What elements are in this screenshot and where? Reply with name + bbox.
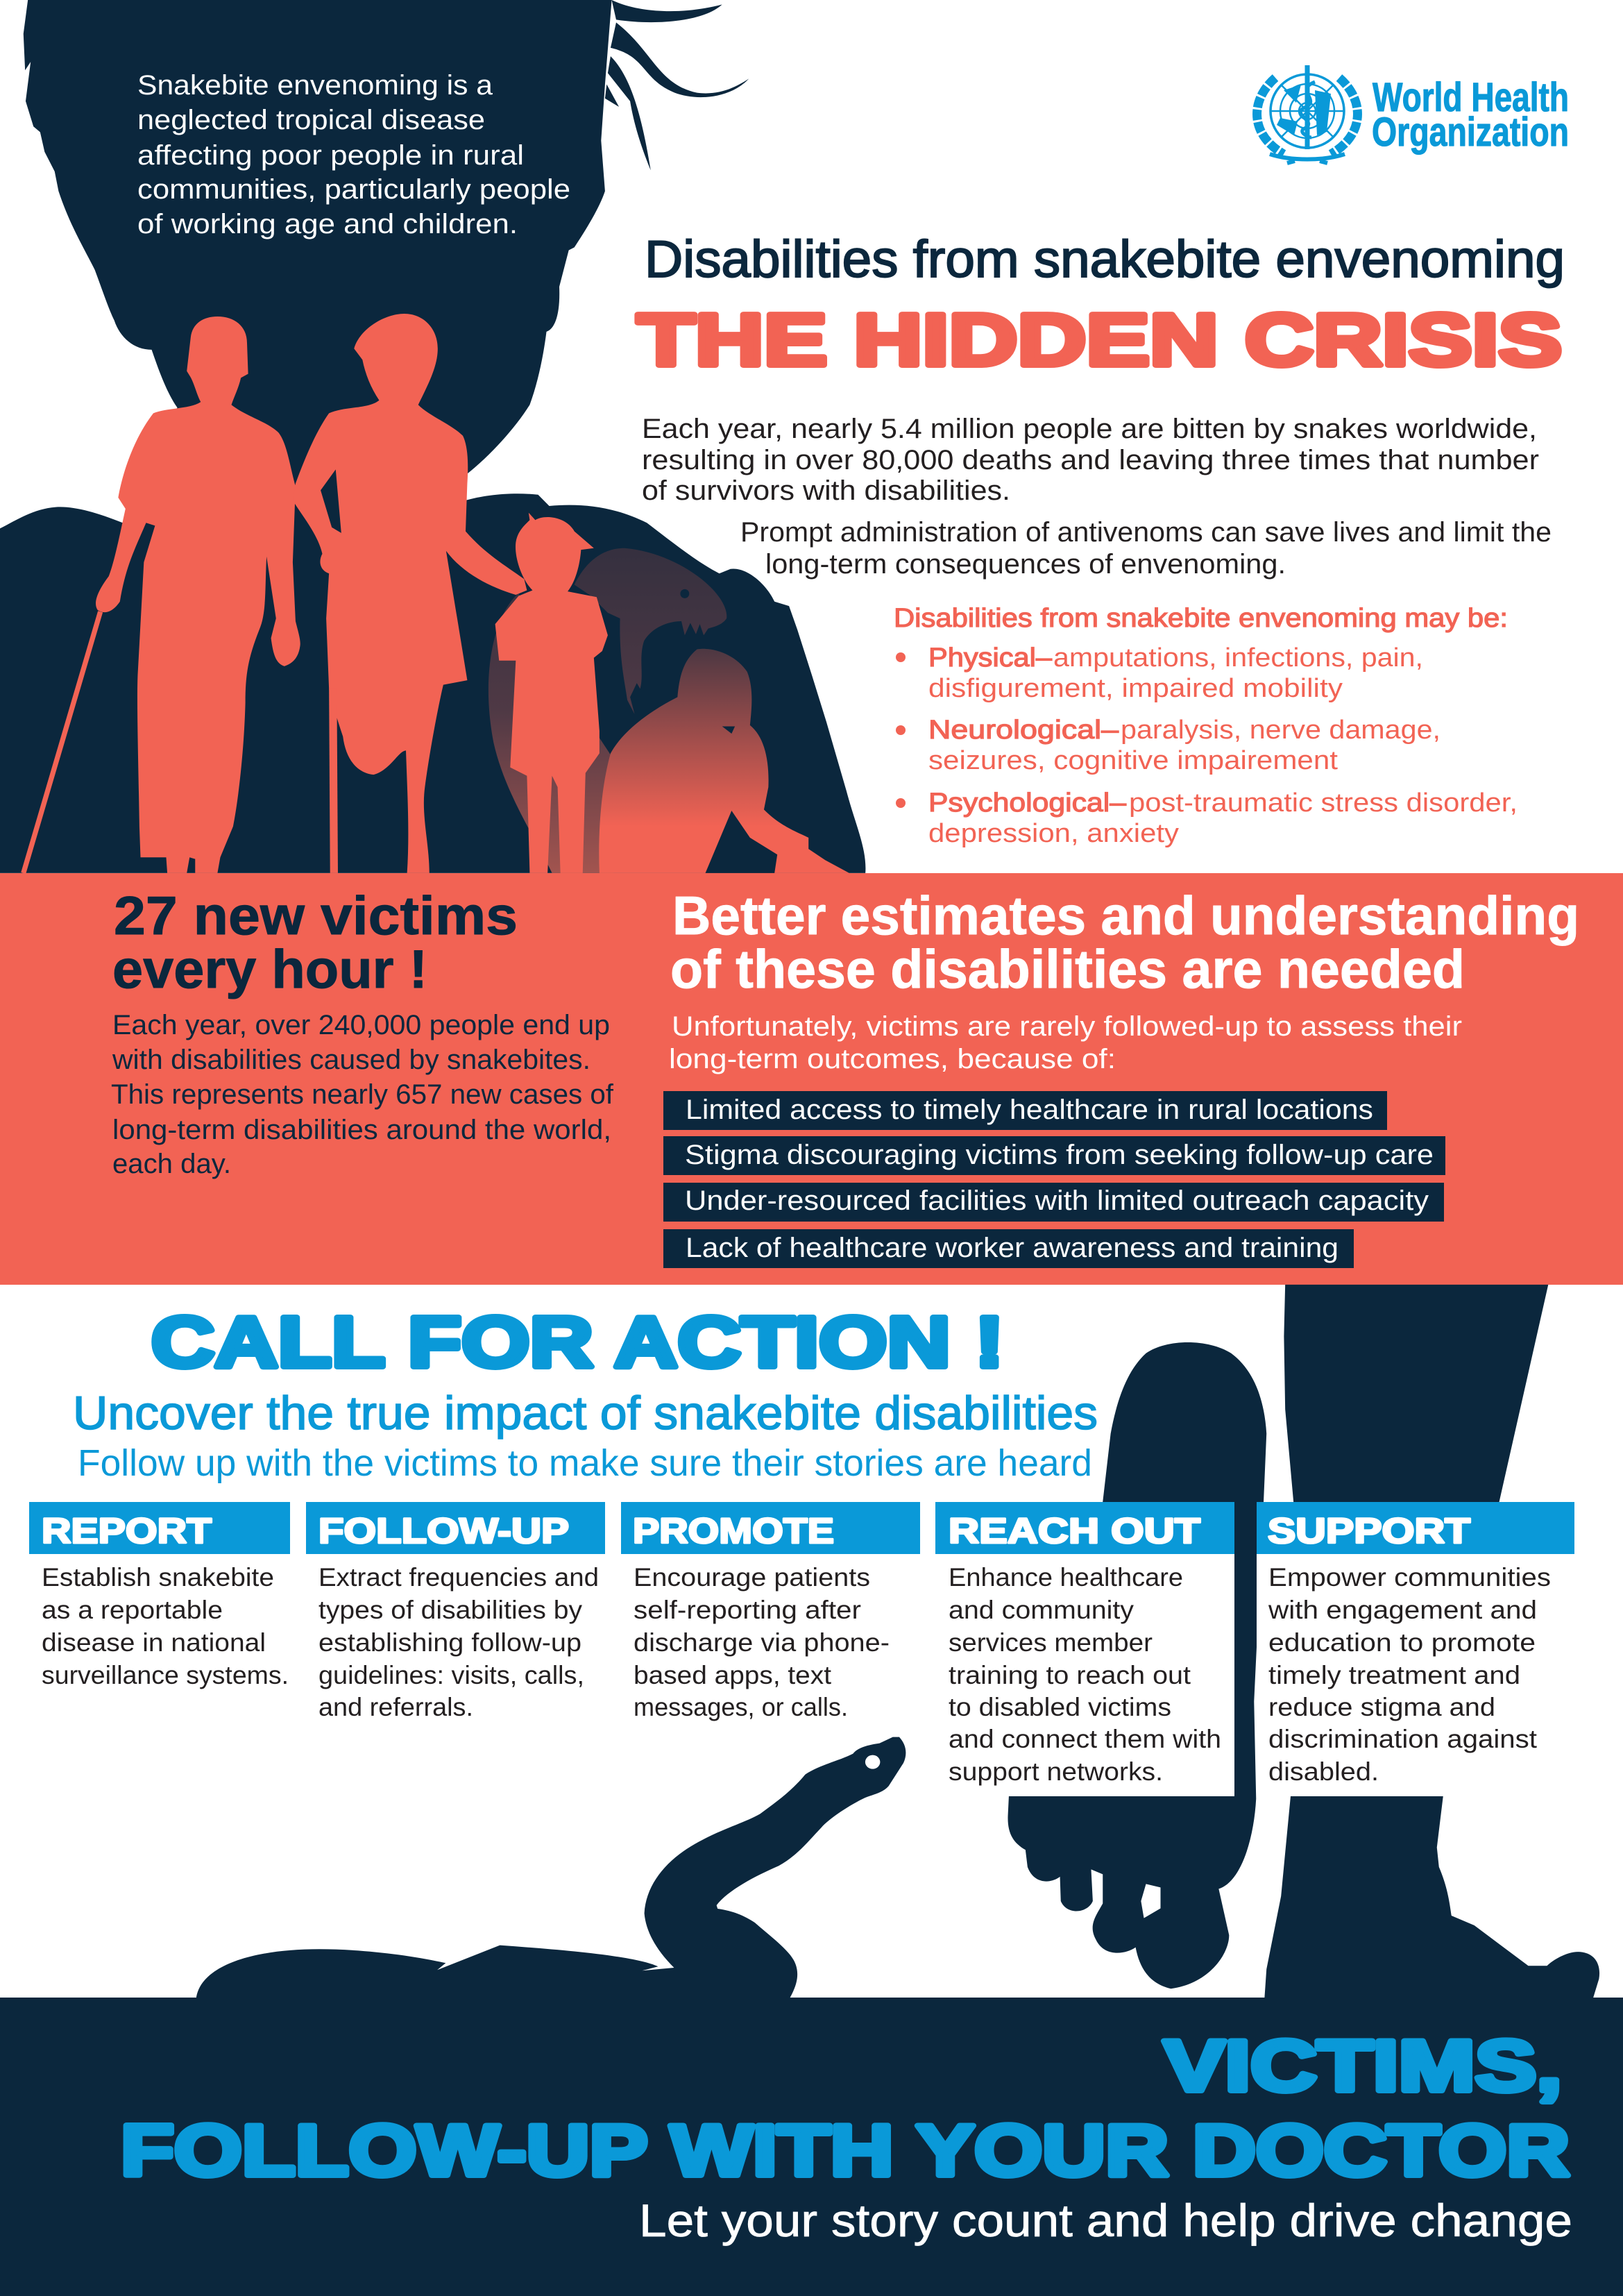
paragraph: long-term outcomes, because of: xyxy=(669,1044,1116,1074)
intro paragraph: Each year, nearly 5.4 million people are bitten by snakes worldwide, xyxy=(642,414,1537,444)
snake in the dark xyxy=(575,548,726,714)
subhead 2: Follow up with the victims to make sure their stories are heard xyxy=(78,1442,1092,1484)
illustration: snake xyxy=(196,1737,906,1999)
paragraph: Unfortunately, victims are rarely followed-up to assess their xyxy=(672,1011,1462,1042)
paragraph xyxy=(669,1011,1462,1074)
title xyxy=(637,230,1565,381)
card: support: SUPPORT xyxy=(1268,1511,1470,1551)
bar: stigma xyxy=(663,1136,1445,1175)
list item: psychological: Psychological– xyxy=(928,788,1127,818)
intro text on head xyxy=(137,70,570,239)
intro text on head: of working age and children. xyxy=(137,209,518,239)
stat text: long-term disabilities around the world, xyxy=(112,1115,611,1145)
gap between the sitting figure's legs xyxy=(706,727,777,873)
intro text on head: affecting poor people in rural xyxy=(137,140,524,171)
card: support: with engagement and xyxy=(1268,1596,1537,1624)
stat heading: 27 new victims xyxy=(114,885,518,946)
card: support: discrimination against xyxy=(1268,1725,1538,1753)
icon: emblem xyxy=(1257,65,1357,163)
list item: psychological xyxy=(896,788,1518,848)
intro paragraph xyxy=(642,414,1552,580)
list item: physical: Physical– xyxy=(928,643,1053,673)
card: reach out: to disabled victims xyxy=(949,1693,1171,1721)
card: support: disabled. xyxy=(1268,1757,1379,1786)
call for action heading xyxy=(73,1302,1098,1484)
stat heading: every hour ! xyxy=(112,938,427,999)
logo wordmark xyxy=(1372,75,1569,155)
list item: neurological: seizures, cognitive impairement xyxy=(928,746,1338,775)
bar: under-resourced: Under-resourced facilities with limited outreach capacity xyxy=(685,1185,1429,1216)
intro text on head: communities, particularly people xyxy=(137,174,570,205)
list item: neurological xyxy=(896,716,1441,775)
card: follow-up: establishing follow-up xyxy=(318,1628,581,1657)
panel: bottom call to victims xyxy=(0,1998,1623,2296)
card: follow-up: and referrals. xyxy=(318,1693,473,1721)
heading xyxy=(670,885,1579,999)
list: types of disabilities xyxy=(894,604,1518,848)
sitting figure with gradient xyxy=(599,649,849,873)
card: report: Establish snakebite xyxy=(42,1563,274,1592)
illustration: silhouettes of head, survivors, snake xyxy=(0,0,865,873)
logo wordmark: Organization xyxy=(1372,110,1569,155)
bar: under-resourced xyxy=(663,1183,1444,1222)
cane xyxy=(24,611,101,873)
card: follow-up: FOLLOW-UP xyxy=(318,1511,569,1551)
bar: lack of awareness xyxy=(663,1229,1354,1268)
big head and shoulders silhouette xyxy=(0,0,865,873)
subhead: Uncover the true impact of snakebite disabilities xyxy=(73,1387,1098,1440)
list heading: Disabilities from snakebite envenoming may be: xyxy=(894,604,1508,633)
gap between toes xyxy=(1141,1884,1160,1918)
card: reach out: REACH OUT xyxy=(949,1511,1200,1551)
intro paragraph: Prompt administration of antivenoms can save lives and limit the xyxy=(740,517,1552,548)
stat text: each day. xyxy=(112,1149,231,1179)
panel: 27 new victims xyxy=(111,885,614,1179)
child xyxy=(495,513,608,873)
card: promote: based apps, text xyxy=(634,1661,832,1689)
card: promote: PROMOTE xyxy=(633,1511,834,1551)
card: reach out: and community xyxy=(949,1596,1135,1624)
card: support: reduce stigma and xyxy=(1268,1693,1495,1721)
headline line 1: VICTIMS, xyxy=(1164,2026,1562,2107)
bar: limited access xyxy=(663,1091,1387,1130)
intro paragraph: resulting in over 80,000 deaths and leaving three times that number xyxy=(642,445,1539,475)
panel: better estimates xyxy=(663,885,1579,1268)
headline line 2: FOLLOW-UP WITH YOUR DOCTOR xyxy=(121,2111,1570,2191)
list item: physical xyxy=(896,643,1423,703)
stat text xyxy=(111,1010,614,1179)
logo wordmark: World Health xyxy=(1373,75,1569,120)
stat text: This represents nearly 657 new cases of xyxy=(111,1079,614,1110)
card: promote: self-reporting after xyxy=(634,1596,861,1624)
subtitle: Disabilities from snakebite envenoming xyxy=(645,230,1565,288)
icon: WHO logo xyxy=(1257,65,1569,163)
list item: psychological: post-traumatic stress disorder, xyxy=(1129,788,1518,818)
headline: CALL FOR ACTION ! xyxy=(151,1302,1004,1382)
tagline: Let your story count and help drive change xyxy=(639,2195,1572,2246)
main headline: THE HIDDEN CRISIS xyxy=(637,299,1562,381)
intro paragraph: of survivors with disabilities. xyxy=(642,475,1010,506)
stat text: Each year, over 240,000 people end up xyxy=(112,1010,610,1040)
survivor with cane xyxy=(96,316,300,873)
card: reach out: services member xyxy=(949,1628,1153,1657)
card: report xyxy=(29,1502,290,1689)
card: support: Empower communities xyxy=(1268,1563,1551,1592)
intro text on head: Snakebite envenoming is a xyxy=(137,70,493,101)
card: reach out: training to reach out xyxy=(949,1661,1191,1689)
gap between arm and torso xyxy=(321,469,341,533)
card: promote xyxy=(621,1502,920,1721)
card: follow-up: Extract frequencies and xyxy=(318,1563,599,1592)
card: follow-up: guidelines: visits, calls, xyxy=(318,1661,584,1689)
panel: coral band xyxy=(0,873,1623,1285)
intro text on head: neglected tropical disease xyxy=(137,105,485,135)
list item: physical: amputations, infections, pain, xyxy=(1053,643,1423,673)
bar: stigma: Stigma discouraging victims from seeking follow-up care xyxy=(685,1140,1434,1170)
stat heading xyxy=(112,885,518,999)
card: follow-up xyxy=(306,1502,605,1721)
card: promote: Encourage patients xyxy=(634,1563,870,1592)
heading: of these disabilities are needed xyxy=(670,938,1465,999)
bar: limited access: Limited access to timely healthcare in rural locations xyxy=(686,1095,1373,1125)
card: reach out xyxy=(935,1502,1234,1796)
standing leg and foot xyxy=(1264,1285,1599,2000)
card: report: disease in national xyxy=(42,1628,266,1657)
amputee survivor xyxy=(293,314,527,873)
stat text: with disabilities caused by snakebites. xyxy=(112,1045,590,1075)
card: promote: messages, or calls. xyxy=(634,1693,848,1721)
card: report: surveillance systems. xyxy=(42,1661,289,1689)
card: report: REPORT xyxy=(42,1511,212,1551)
illustration: foot silhouettes xyxy=(1008,1285,1599,2000)
card: support xyxy=(1257,1502,1574,1796)
card: reach out: Enhance healthcare xyxy=(949,1563,1183,1592)
card: support: education to promote xyxy=(1268,1628,1536,1657)
snake eye xyxy=(680,589,689,598)
list item: neurological: paralysis, nerve damage, xyxy=(1121,716,1441,745)
card: report: as a reportable xyxy=(42,1596,223,1624)
card: reach out: and connect them with xyxy=(949,1725,1221,1753)
card: promote: discharge via phone- xyxy=(634,1628,890,1657)
gradient halo behind the child xyxy=(488,593,613,873)
crutch and arm gap xyxy=(329,689,338,873)
list item: neurological: Neurological– xyxy=(928,716,1119,745)
list item: psychological: depression, anxiety xyxy=(928,819,1179,848)
hair strands xyxy=(605,0,749,170)
heading: Better estimates and understanding xyxy=(672,885,1579,946)
raised foot xyxy=(1008,1342,1266,1989)
bar: lack of awareness: Lack of healthcare worker awareness and training xyxy=(686,1233,1339,1263)
card: follow-up: types of disabilities by xyxy=(318,1596,583,1624)
card: reach out: support networks. xyxy=(949,1757,1163,1786)
intro paragraph: long-term consequences of envenoming. xyxy=(765,549,1286,580)
list item: physical: disfigurement, impaired mobility xyxy=(928,674,1343,703)
card: support: timely treatment and xyxy=(1268,1661,1520,1689)
snake eye xyxy=(865,1755,880,1769)
